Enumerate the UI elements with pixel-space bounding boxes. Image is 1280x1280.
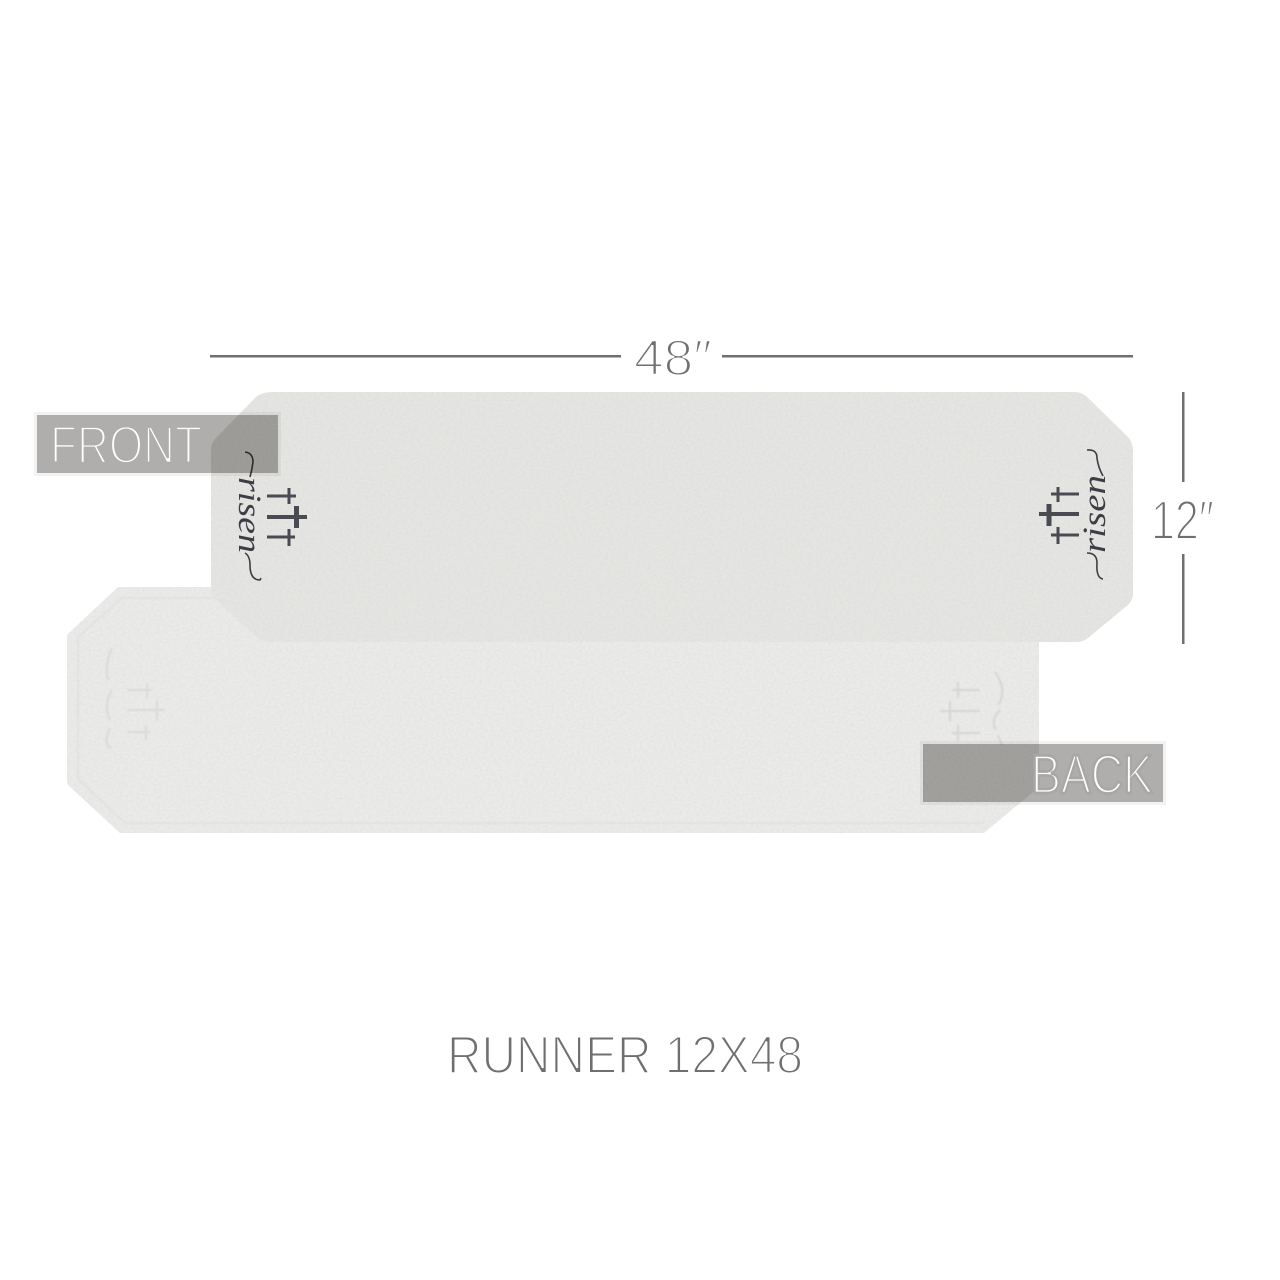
ghost print: right end [940,672,1002,745]
infographic canvas [34,341,1212,1072]
runner: back side [60,580,1045,840]
print: left script [231,452,267,580]
print: right crosses [1039,487,1079,544]
label: BACK [922,742,1164,805]
dimension: width 48 inches: 48″ [634,330,712,386]
ghost print: left end [106,648,165,748]
dimension: height 12 inches: 12″ [1151,489,1214,551]
print: right script [1077,450,1113,579]
print: left script: risen [231,477,267,553]
label: BACK: BACK [1031,743,1153,805]
label: FRONT: FRONT [50,416,202,475]
print: right script: risen [1077,475,1113,553]
runner: front side [205,388,1140,646]
back hem stitching [78,598,984,823]
caption: product size: RUNNER 12X48 [447,1026,803,1085]
print: left crosses [267,488,307,546]
